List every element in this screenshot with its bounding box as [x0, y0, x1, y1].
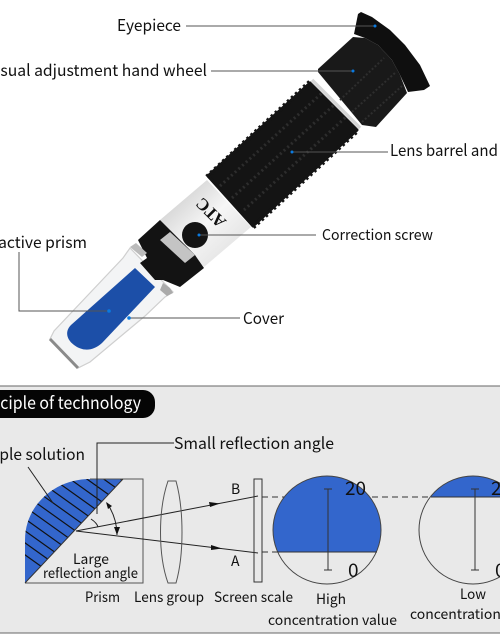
dashed guides: [262, 497, 430, 552]
diagram labels: Small reflection angle: [174, 430, 334, 454]
correction screw knob: [182, 222, 208, 248]
diagram labels: Screen scale: [214, 587, 293, 607]
rays: [28, 443, 258, 553]
screen scale: [254, 479, 262, 582]
clamp: [138, 220, 204, 287]
lens group: [160, 481, 182, 583]
diagram labels: High: [316, 589, 346, 609]
blue marker dots: [107, 24, 376, 320]
diagram labels: reflection angle: [43, 563, 138, 583]
low concentration circle: [415, 470, 500, 584]
diagram labels: Large: [73, 549, 109, 569]
silver ring: [312, 80, 360, 128]
panel: principle of technology: [0, 381, 500, 637]
ATC mark: ATC: [192, 194, 230, 232]
high concentration circle: 0: [348, 556, 359, 583]
callout labels: Cover: [243, 305, 285, 329]
high concentration circle: 20: [345, 474, 366, 501]
diagram labels: A: [231, 551, 240, 571]
silver body: [160, 180, 251, 267]
diagram labels: [0, 430, 500, 630]
diagram labels: B: [231, 479, 240, 499]
refractive prism blue: [67, 268, 155, 350]
diagram labels: concentration value: [268, 610, 397, 630]
high concentration circle: [270, 470, 385, 584]
adjustment hand wheel: [318, 37, 407, 127]
cover glass: [50, 248, 173, 368]
refractometer device: [50, 12, 430, 368]
sample solution hatch: [25, 479, 122, 582]
diagram labels: Prism: [85, 587, 120, 607]
eyepiece: [354, 12, 430, 92]
callout labels: [0, 12, 500, 329]
callout labels: Eyepiece: [117, 12, 181, 36]
diagram labels: Low: [460, 584, 486, 604]
lens barrel and handle: [208, 83, 357, 226]
arrowheads: [106, 502, 222, 550]
diagram labels: Lens group: [134, 587, 204, 607]
callout labels: Correction screw: [322, 224, 433, 245]
leader lines: [19, 26, 388, 318]
prism: [25, 479, 143, 583]
